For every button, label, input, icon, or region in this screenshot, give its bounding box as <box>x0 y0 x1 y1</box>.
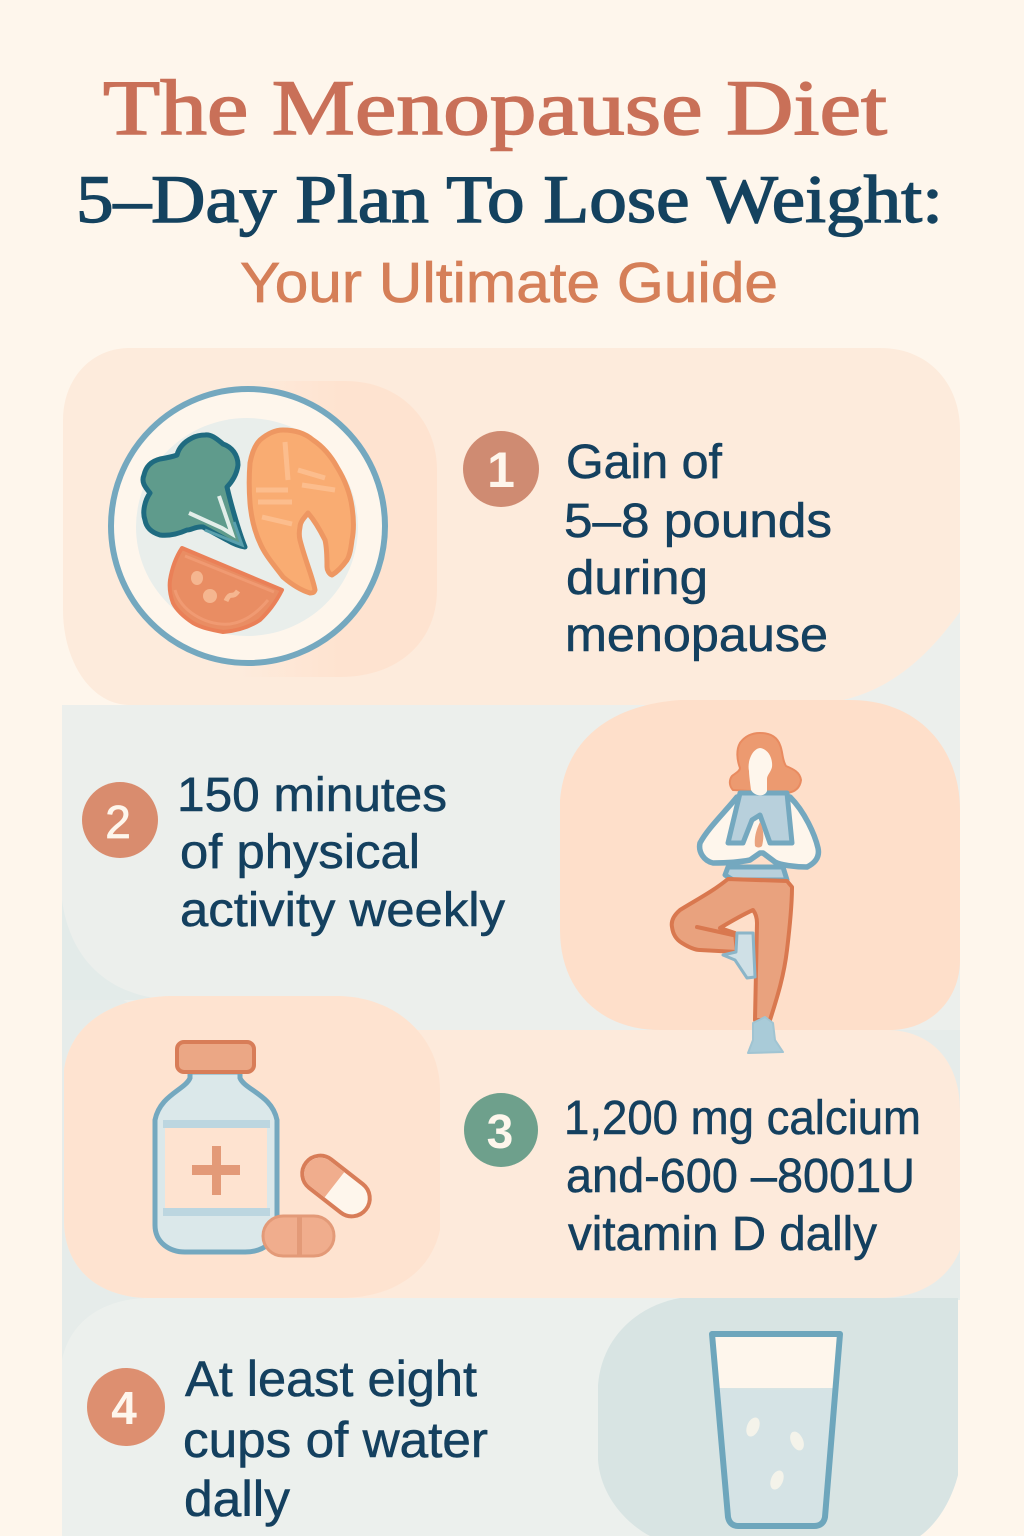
icon panel: plate backdrop <box>200 381 437 677</box>
icon: tomato slice <box>170 548 282 632</box>
number badge 4: 4 <box>111 1382 137 1434</box>
legs <box>672 879 792 1020</box>
icon panel: yoga backdrop <box>560 700 960 1030</box>
icon: capsule pill <box>295 1148 377 1224</box>
text: 150 minutes of physical activity <box>177 769 505 937</box>
top vest <box>728 793 792 843</box>
title line 1: The Menopause Diet <box>103 64 887 151</box>
number badge 2: 2 <box>105 796 131 848</box>
text: calcium and vitamin D: vitamin D dally <box>568 1208 877 1261</box>
icon: round pill <box>263 1216 334 1256</box>
background band: blue column behind rows <box>62 612 960 1536</box>
number badge 1 <box>463 431 539 507</box>
text: gain of 5-8 pounds: 5–8 pounds <box>564 495 832 548</box>
hands <box>755 822 763 848</box>
text: at least eight cups of water: cups of water <box>183 1412 488 1468</box>
face <box>749 748 772 795</box>
icon: broccoli <box>143 435 245 547</box>
icon: salmon steak <box>249 430 354 593</box>
number badge 1: 1 <box>487 442 515 498</box>
icon: cross on label <box>192 1146 240 1195</box>
text: 150 minutes of physical activity: of physical <box>180 826 420 879</box>
text: at least eight cups of water: dally <box>184 1471 290 1527</box>
panel: row 2 activity <box>62 612 960 1030</box>
text: calcium and vitamin D: 1,200 mg calcium <box>564 1092 921 1145</box>
icon: woman in tree pose <box>672 733 818 1053</box>
text: 150 minutes of physical activity: 150 minutes <box>177 769 447 822</box>
text: calcium and vitamin D <box>564 1092 921 1261</box>
icon: glass of water <box>712 1334 840 1526</box>
text: gain of 5-8 pounds: during <box>566 552 708 605</box>
text: gain of 5-8 pounds: Gain of <box>566 436 723 489</box>
number badge 4 <box>87 1368 165 1446</box>
text: 150 minutes of physical activity: activity weekly <box>180 884 505 937</box>
number badge 2 <box>82 782 158 858</box>
hair <box>730 733 801 793</box>
panel: row 1 gain <box>63 348 960 705</box>
icon panel: glass backdrop <box>598 1298 958 1536</box>
text: gain of 5-8 pounds <box>564 436 832 662</box>
standing shoe <box>748 1017 783 1053</box>
text: gain of 5-8 pounds: menopause <box>565 609 828 662</box>
text: calcium and vitamin D: and-600 –8001U <box>566 1150 915 1203</box>
number badge 3: 3 <box>487 1106 513 1159</box>
title line 2: 5–Day Plan To Lose Weight: <box>76 161 943 237</box>
number badge 3 <box>464 1093 538 1167</box>
text: at least eight cups of water: At least eight <box>185 1351 477 1407</box>
raised foot <box>723 933 755 978</box>
knee line <box>697 927 733 935</box>
icon: plate with food <box>111 389 385 663</box>
title line 3: Your Ultimate Guide <box>240 251 778 315</box>
title <box>76 64 943 315</box>
panel: row 3 calcium <box>64 996 960 1298</box>
arms <box>700 797 818 867</box>
icon: supplement bottle and pills <box>155 1042 377 1256</box>
panel: row 4 water <box>62 1298 958 1536</box>
top hem <box>725 867 787 880</box>
text: at least eight cups of water <box>183 1351 488 1527</box>
icon panel: bottle backdrop <box>64 996 440 1298</box>
